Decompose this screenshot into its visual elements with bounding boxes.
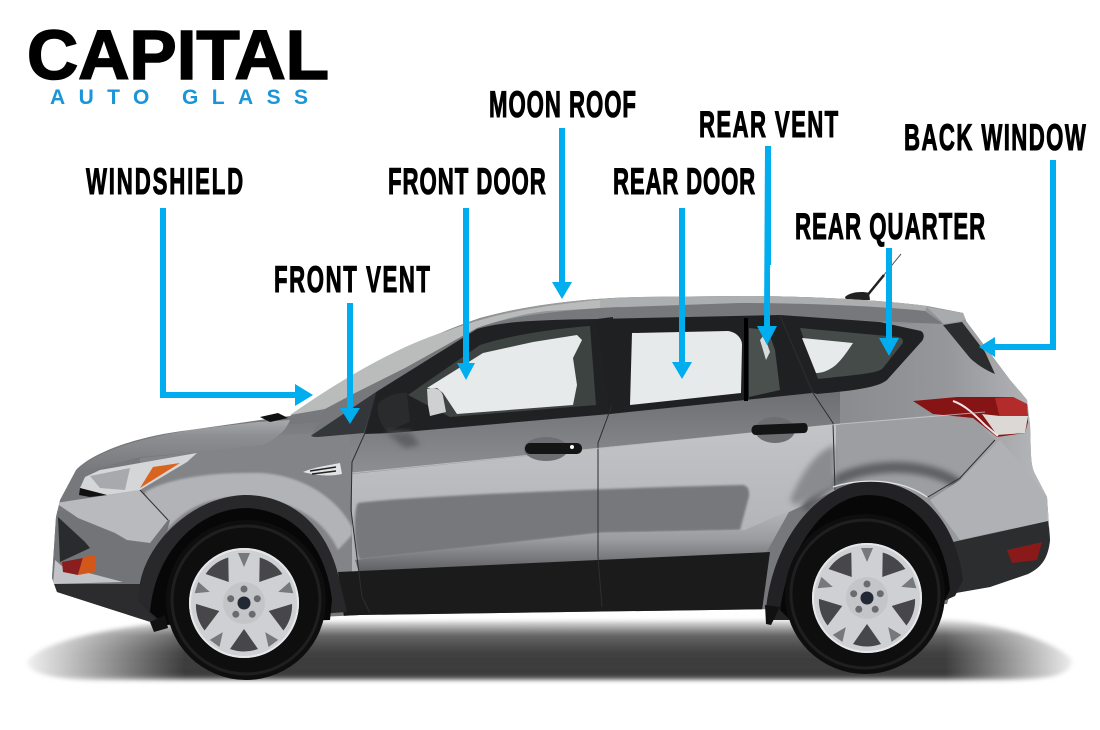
rear arch shading [805, 467, 965, 510]
front vent window [311, 392, 376, 437]
divider bar [744, 318, 748, 401]
rear arch edge highlight [833, 481, 927, 497]
side vent [303, 463, 342, 475]
side mirror [378, 393, 410, 431]
rear vent window [749, 328, 780, 397]
light fender arc [145, 473, 352, 550]
rear wheel arch [766, 481, 963, 620]
front window tint [408, 326, 596, 417]
label: rear door [613, 161, 755, 379]
rear door glass [630, 331, 742, 405]
rear quarter window frame [780, 315, 924, 394]
logo tagline: AUTO GLASS [50, 86, 308, 109]
label: front vent: FRONT VENT [274, 259, 430, 300]
arrow: front door [457, 208, 475, 380]
arrow: front vent [340, 303, 360, 424]
car body [40, 290, 1060, 630]
mirror shadow [385, 432, 420, 448]
label: front vent [274, 259, 430, 424]
rear arch light [790, 445, 835, 505]
arrow: rear quarter [879, 248, 899, 356]
windshield [290, 298, 620, 415]
roof highlight [600, 296, 927, 311]
front wheel [166, 520, 326, 680]
door and panel seams [140, 316, 995, 613]
A-pillar and roof rail [312, 307, 620, 435]
front door glass [427, 335, 582, 414]
bumper lower lip [53, 560, 123, 584]
logo: Capital Auto Glass [27, 16, 329, 109]
arrow: rear vent [757, 146, 777, 345]
upper door panel [290, 392, 840, 474]
crease highlight [352, 412, 985, 473]
arrow: moon roof [552, 128, 572, 299]
front bumper light [56, 490, 168, 543]
label: front door [388, 161, 546, 380]
turn signal [140, 463, 180, 488]
spoiler [927, 307, 966, 324]
rear quarter glass [802, 338, 853, 373]
front bumper dark lower [54, 584, 155, 622]
door dark panel [355, 485, 749, 560]
label: back window [904, 117, 1086, 357]
arrow: windshield [160, 208, 313, 406]
tail light clear lens [982, 414, 1028, 435]
label: rear quarter [795, 206, 985, 356]
rear seam band [836, 415, 994, 496]
sill [338, 552, 770, 616]
label: rear vent [699, 104, 838, 345]
label: moon roof [489, 84, 636, 299]
bumper lip [930, 440, 1000, 540]
front bumper recess [52, 511, 170, 590]
label: windshield [86, 161, 313, 406]
front fender [140, 435, 352, 573]
front window frame [364, 317, 613, 434]
rear quarter panel [840, 321, 1050, 542]
label: rear vent: REAR VENT [699, 104, 838, 145]
label: moon roof: MOON ROOF [489, 84, 636, 125]
label: back window: BACK WINDOW [904, 117, 1086, 158]
fog lamp [62, 555, 95, 575]
headlight [79, 453, 197, 497]
ground shadow [15, 610, 1085, 688]
logo wordmark: CAPITAL [27, 16, 329, 94]
rear vent highlight [760, 335, 770, 360]
wiper [260, 413, 288, 422]
antenna [845, 254, 901, 300]
light door band [352, 424, 840, 575]
front door handle [524, 437, 582, 461]
front wheel arch [138, 495, 347, 625]
roof mid band [600, 303, 943, 324]
roof and pillar strip [291, 296, 1028, 416]
rear reflector [1007, 542, 1042, 563]
label: rear quarter: REAR QUARTER [795, 206, 985, 247]
rear bumper dark [945, 521, 1052, 600]
car illustration [40, 254, 1060, 680]
label: windshield: WINDSHIELD [86, 161, 243, 202]
back window [943, 322, 995, 374]
label: rear door: REAR DOOR [613, 161, 755, 202]
mud flaps [150, 605, 780, 632]
rear wheel [785, 514, 945, 674]
rear quarter tint [800, 328, 903, 379]
tail light upper lens [995, 397, 1028, 418]
mirror chrome [427, 388, 446, 416]
lower door band [355, 510, 790, 575]
label: front door: FRONT DOOR [388, 161, 546, 202]
arrow: back window [979, 160, 1056, 357]
arrow: rear door [672, 208, 692, 379]
front grille [58, 517, 90, 562]
tail light [913, 397, 1028, 437]
B-pillar and rear door frame [597, 315, 812, 414]
tail light chrome stripe [953, 401, 998, 436]
rear door handle [752, 417, 808, 443]
hood [77, 420, 290, 472]
